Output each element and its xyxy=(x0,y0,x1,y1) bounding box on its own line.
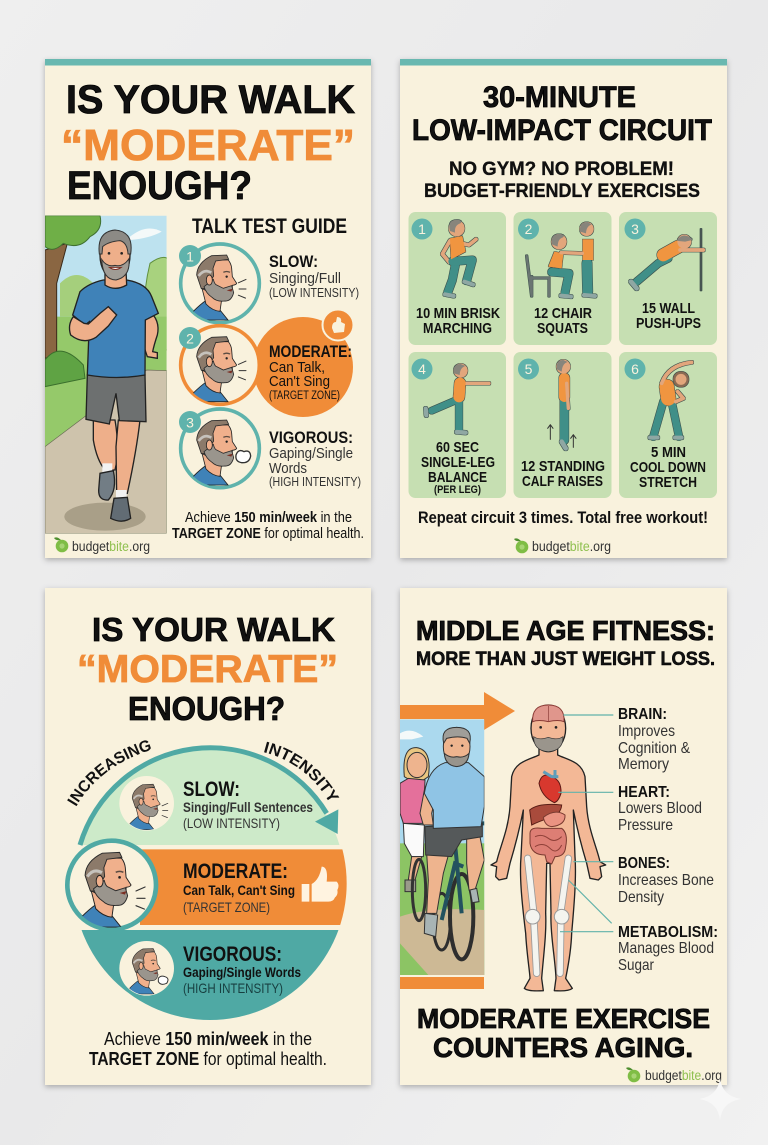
number badges: 3 xyxy=(186,414,194,430)
thumbs up icon xyxy=(302,867,339,902)
number badges xyxy=(412,218,646,380)
text: moderate: MODERATE: xyxy=(183,860,288,883)
label: metabolism: METABOLISM: xyxy=(618,924,718,941)
text: slow: (LOW INTENSITY) xyxy=(183,815,280,831)
man legs xyxy=(426,856,448,914)
label: metabolism: Sugar xyxy=(618,957,655,974)
heading xyxy=(412,81,712,147)
label: brain: Memory xyxy=(618,756,669,773)
intestines xyxy=(530,828,566,864)
illustration: man walking in park xyxy=(45,216,173,533)
heading: LOW-IMPACT CIRCUIT xyxy=(412,114,712,147)
footer note: TARGET ZONE for optimal health. xyxy=(172,525,364,542)
number badges: 3 xyxy=(631,221,639,237)
increasing intensity arrow xyxy=(80,748,338,845)
exercise labels: STRETCH xyxy=(639,474,697,491)
heading: “MODERATE” xyxy=(77,648,338,691)
exercise labels: PUSH-UPS xyxy=(636,315,701,332)
figure 3: wall push-ups xyxy=(631,229,703,290)
closing statement: MODERATE EXERCISE xyxy=(417,1003,710,1034)
card xyxy=(400,59,727,558)
card xyxy=(45,59,371,558)
closing statement: COUNTERS AGING. xyxy=(433,1032,693,1063)
exercise labels: MARCHING xyxy=(423,320,492,337)
curved label: increasing: INCREASING xyxy=(67,740,151,806)
text: moderate: MODERATE: xyxy=(269,342,352,361)
panel: talk test guide poster xyxy=(45,59,371,558)
exercise labels: (PER LEG) xyxy=(434,484,481,496)
subheading: NO GYM? NO PROBLEM! xyxy=(449,159,674,180)
left arm xyxy=(69,307,117,341)
leg bones xyxy=(525,858,569,973)
number badges: 1 xyxy=(418,221,426,237)
calf raise arrows xyxy=(548,425,576,447)
avatar: moderate xyxy=(181,326,259,404)
teal top bar xyxy=(400,59,727,66)
figure 1: marching xyxy=(442,220,476,296)
zone: vigorous xyxy=(82,930,338,1020)
subheading: BUDGET-FRIENDLY EXERCISES xyxy=(424,181,700,202)
footer note: TARGET ZONE for optimal health. xyxy=(89,1049,327,1069)
logo: budgetbite.org xyxy=(72,539,150,554)
panel: low-impact circuit poster xyxy=(400,59,727,558)
text: moderate: Can Talk, Can't Sing xyxy=(183,883,295,898)
bike xyxy=(433,893,450,950)
logo: budgetbite.org xyxy=(532,539,611,554)
shorts xyxy=(86,375,146,424)
exercise labels: 15 WALL xyxy=(642,300,695,317)
subheading xyxy=(424,159,700,202)
repeat note: Repeat circuit 3 times. Total free workout! xyxy=(418,508,708,527)
label: bones: Density xyxy=(618,889,664,906)
text: slow: (LOW INTENSITY) xyxy=(269,285,359,300)
woman xyxy=(404,748,429,780)
number badges: 1 xyxy=(186,248,194,264)
label: heart xyxy=(618,784,702,834)
zone: moderate xyxy=(140,849,347,925)
right arm xyxy=(146,316,159,360)
avatar: moderate xyxy=(67,841,156,929)
exercise labels: 12 STANDING xyxy=(521,458,605,475)
heading: 30-MINUTE xyxy=(483,81,636,114)
heading: MIDDLE AGE FITNESS: xyxy=(416,615,715,646)
panel: intensity circle poster xyxy=(42,587,374,1090)
number badges: 5 xyxy=(525,361,533,377)
label: heart: Lowers Blood xyxy=(618,800,702,817)
number badges: 6 xyxy=(631,361,639,377)
label: metabolism: Manages Blood xyxy=(618,940,714,957)
label: heart: Pressure xyxy=(618,817,673,834)
heading xyxy=(61,78,355,208)
shorts xyxy=(425,823,482,857)
heading: “MODERATE” xyxy=(61,121,355,170)
shirt xyxy=(73,280,158,377)
heading xyxy=(77,611,338,727)
label: brain: Cognition & xyxy=(618,740,690,757)
number badges xyxy=(179,245,201,433)
exercise labels: CALF RAISES xyxy=(522,473,603,490)
text: vigorous xyxy=(183,943,301,996)
zone: slow xyxy=(82,750,340,845)
heading: ENOUGH? xyxy=(67,164,252,208)
heading xyxy=(416,615,715,670)
figure 2: chair squats xyxy=(527,222,595,297)
heading: MORE THAN JUST WEIGHT LOSS. xyxy=(416,649,715,670)
label: bones: BONES: xyxy=(618,855,670,872)
figure 4: single-leg balance xyxy=(426,364,489,433)
card xyxy=(400,588,727,1085)
figure 5: calf raises xyxy=(556,360,570,448)
exercise labels: SQUATS xyxy=(537,320,588,337)
exercise labels: 10 MIN BRISK xyxy=(416,305,500,322)
label: heart: HEART: xyxy=(618,784,670,801)
exercise labels: 5 MIN xyxy=(651,444,686,461)
text: vigorous: VIGOROUS: xyxy=(183,943,282,966)
heading: IS YOUR WALK xyxy=(66,78,355,122)
text: moderate: Can't Sing xyxy=(269,373,330,390)
avatar: vigorous xyxy=(119,941,174,996)
footer note: Achieve 150 min/week in the xyxy=(185,509,352,526)
exercise figures xyxy=(426,220,703,448)
watermark star xyxy=(699,1078,741,1120)
text: moderate: (TARGET ZONE) xyxy=(269,390,340,402)
text: moderate: Can Talk, xyxy=(269,359,325,376)
talk test heading: TALK TEST GUIDE xyxy=(192,215,347,238)
label: bones xyxy=(618,855,714,906)
arm xyxy=(420,786,433,826)
avatar: slow xyxy=(119,776,174,831)
label: brain xyxy=(618,706,690,773)
anatomy figure xyxy=(491,705,613,991)
text: vigorous xyxy=(269,428,361,489)
text: slow xyxy=(183,778,313,831)
text: vigorous: VIGOROUS: xyxy=(269,428,353,447)
footer note xyxy=(172,509,364,542)
logo: budgetbite.org xyxy=(645,1068,722,1083)
label: bones: Increases Bone xyxy=(618,872,714,889)
exercise labels: COOL DOWN xyxy=(630,459,706,476)
label: brain: Improves xyxy=(618,723,675,740)
avatar: vigorous xyxy=(181,409,259,488)
text: moderate: (TARGET ZONE) xyxy=(183,899,270,915)
exercise labels: BALANCE xyxy=(428,469,487,486)
heading: ENOUGH? xyxy=(128,690,285,727)
text: slow: Singing/Full Sentences xyxy=(183,800,313,815)
heading: IS YOUR WALK xyxy=(92,611,335,648)
number badges: 2 xyxy=(525,221,533,237)
card xyxy=(45,588,371,1085)
label: brain: BRAIN: xyxy=(618,706,667,723)
text: vigorous: Gaping/Single Words xyxy=(183,965,301,980)
head xyxy=(442,726,470,757)
exercise labels: SINGLE-LEG xyxy=(421,454,495,471)
text: moderate xyxy=(269,342,352,402)
text: slow: Singing/Full xyxy=(269,270,341,287)
heart xyxy=(539,770,561,803)
head xyxy=(105,270,127,288)
figure 6: cool down stretch xyxy=(650,362,692,438)
exercise labels: 12 CHAIR xyxy=(534,305,592,322)
intensity circle diagram xyxy=(67,747,347,1020)
head and brain xyxy=(531,705,566,752)
exercise labels xyxy=(416,300,706,496)
body outline xyxy=(491,748,606,991)
curved label: intensity: INTENSITY. xyxy=(264,742,340,800)
text: slow: SLOW: xyxy=(269,252,318,271)
text: vigorous: (HIGH INTENSITY) xyxy=(183,980,283,996)
leader lines xyxy=(558,715,613,932)
number badges: 4 xyxy=(418,361,426,377)
exercise labels: 60 SEC xyxy=(436,439,479,456)
orange moderate blob xyxy=(253,310,354,417)
legs xyxy=(93,420,117,470)
text: vigorous: Gaping/Single xyxy=(269,445,353,462)
shirt xyxy=(424,763,484,828)
footer note xyxy=(89,1029,327,1069)
label: metabolism xyxy=(618,924,718,974)
closing statement xyxy=(417,1003,710,1063)
footer note: Achieve 150 min/week in the xyxy=(104,1029,312,1049)
panel: middle age fitness poster xyxy=(400,588,727,1085)
teal top bar xyxy=(45,59,371,66)
illustration: couple cycling xyxy=(400,719,484,977)
avatar: slow xyxy=(181,244,259,323)
liver and stomach xyxy=(530,804,565,827)
level avatars xyxy=(181,244,259,488)
exercise tiles xyxy=(408,212,717,498)
number badges: 2 xyxy=(186,330,194,346)
orange arrow and strip xyxy=(400,692,515,989)
text: vigorous: Words xyxy=(269,460,307,477)
text: moderate xyxy=(183,860,295,915)
text: vigorous: (HIGH INTENSITY) xyxy=(269,474,361,489)
text: slow: SLOW: xyxy=(183,778,240,801)
text: slow xyxy=(269,252,359,300)
